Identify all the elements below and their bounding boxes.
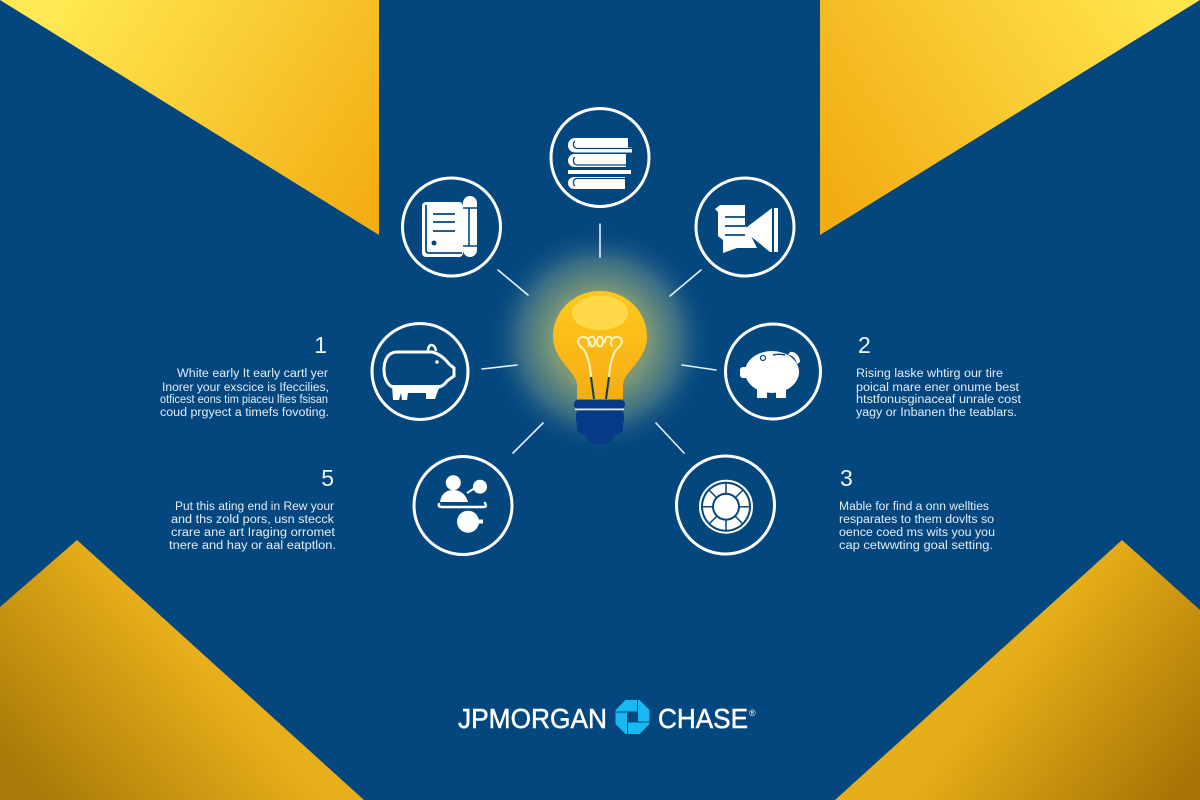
text block 5: Put this ating end in Rew your [175,501,334,513]
bulb glass [553,291,647,399]
text block 2: Rising laske whtirg our tire [856,368,1003,380]
filament [578,337,622,377]
text block 3: resparates to them dovlts so [839,514,994,526]
icon: chat and triangle [696,178,794,276]
text block 2: yagy or Inbanen the teablars. [856,407,1017,419]
spokes [482,224,716,453]
bulb glow [486,226,714,454]
text block 1 [160,332,329,419]
text block 5: crare ane art Iraging orromet [171,527,336,539]
central light bulb [553,291,647,444]
text block 3: 3 [840,465,853,491]
text block 2: 2 [858,332,871,358]
text block 2: poical mare ener onume best [856,382,1020,394]
logo octagon [616,700,650,734]
text block 5: tnere and hay or aal eatptlon. [169,540,336,552]
text block 1: Inorer your exscice is Ifeccilies, [162,382,329,394]
text block 1: White early It early cartl yer [177,368,328,380]
text block 5: 5 [321,465,334,491]
text block 1: otficest eons tim piaceu lfies fsisan [160,394,328,406]
icon: piggy bank [726,324,820,419]
filament posts [591,377,609,399]
text block 5: and ths zold pors, usn stecck [171,514,334,526]
text block 3: cap cetwwting goal setting. [839,540,993,552]
text block 3 [839,465,995,552]
text block 2: htstfonusginaceaf unrale cost [856,394,1022,406]
icon: people network [414,456,512,554]
icon: books [551,108,649,206]
icon: notebook and pencil [402,178,500,276]
text block 1: coud prgyect a timefs fovoting. [160,407,329,419]
icon: wheel [676,456,774,554]
logo: JPMorgan Chase: ® [749,708,756,718]
logo: JPMorgan Chase [458,700,756,734]
text block 5 [169,465,336,552]
text block 3: oence coed ms wits you you [839,527,995,539]
logo: JPMorgan Chase: JPMORGAN [458,703,607,734]
corner shape: top left [0,0,379,235]
text block 2 [856,332,1022,419]
corner shape: bottom left [0,540,364,800]
icon: piggy outline [372,324,468,420]
corner shape: top right [820,0,1200,235]
text block 3: Mable for find a onn wellties [839,501,989,513]
bulb highlight [572,296,628,330]
bulb base [574,400,625,444]
text block 1: 1 [314,332,327,358]
corner shape: bottom right [835,540,1200,800]
logo: JPMorgan Chase: CHASE [658,703,748,734]
